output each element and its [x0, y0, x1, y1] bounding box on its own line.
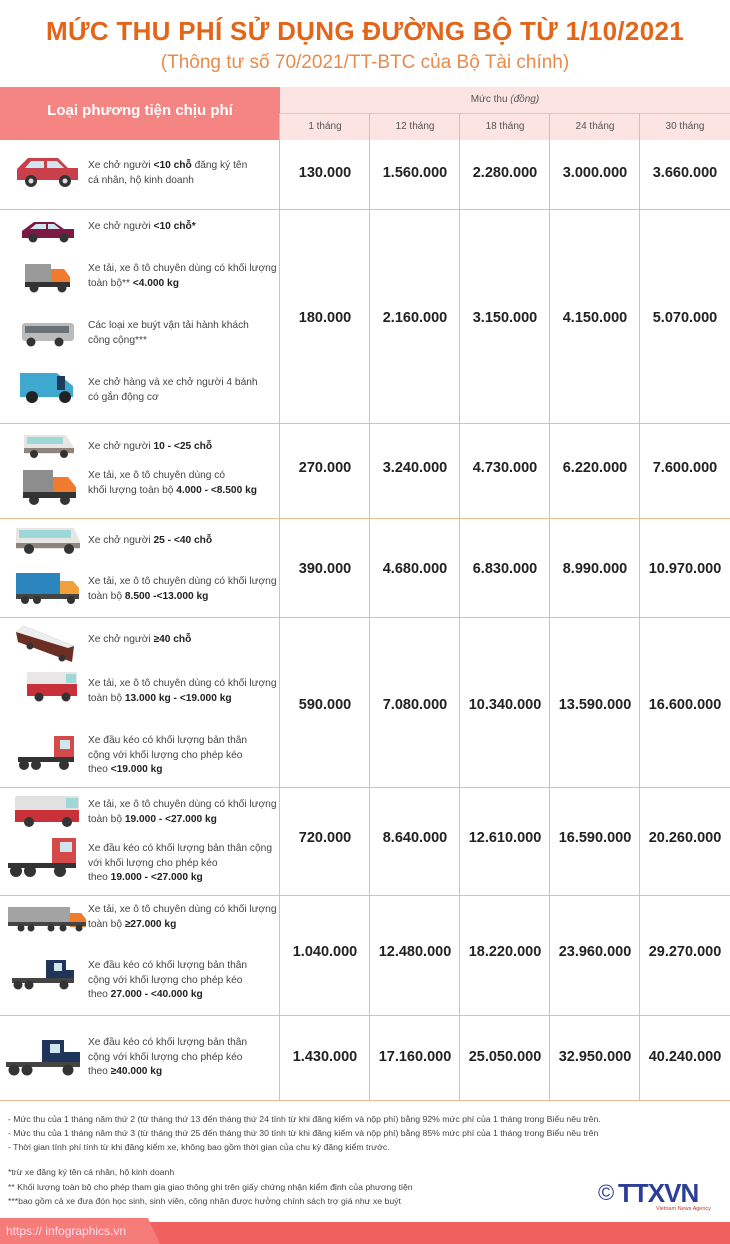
- row 7: 23.960.000: [559, 944, 631, 960]
- text: cá nhân, hộ kinh doanh: [88, 174, 194, 186]
- row 8: 40.240.000: [649, 1049, 721, 1065]
- icon: van: [20, 373, 73, 403]
- notes: - Mức thu của 1 tháng năm thứ 2 (từ tháng thứ 13 đến tháng thứ 24 tính từ khi đăng kiểm và nộp phí) bằng 92% mức phí của 1 tháng trong Biểu nêu trên.: [8, 1114, 601, 1124]
- row 2: có gắn động cơ: [88, 392, 159, 402]
- icon: red tractor: [18, 736, 74, 770]
- notes: [8, 1114, 601, 1152]
- row 2: Xe chở người <10 chỗ*: [88, 221, 196, 232]
- values: 180.000: [299, 310, 351, 326]
- row 1: 1.560.000: [383, 165, 447, 181]
- footnotes: ** Khối lượng toàn bộ cho phép tham gia giao thông ghi trên giấy chứng nhận kiểm định của phương tiện: [8, 1182, 413, 1192]
- row 2: 3.150.000: [473, 310, 537, 326]
- icon: red box truck: [27, 672, 77, 702]
- row 4: 4.680.000: [383, 561, 447, 577]
- row 6: 20.260.000: [649, 830, 721, 846]
- row 5: 13.590.000: [559, 697, 631, 713]
- row 5: Xe tải, xe ô tô chuyên dùng có khối lượng: [88, 678, 277, 689]
- row 1: 2.280.000: [473, 165, 537, 181]
- title: MỨC THU PHÍ SỬ DỤNG ĐƯỜNG BỘ TỪ 1/10/2021: [46, 16, 684, 46]
- row 6: với khối lượng cho phép kéo: [88, 858, 218, 868]
- row 8: 32.950.000: [559, 1049, 631, 1065]
- values: 590.000: [299, 697, 351, 713]
- row 7: toàn bộ ≥27.000 kg: [88, 918, 176, 930]
- row 5: toàn bộ 13.000 kg - <19.000 kg: [88, 692, 232, 704]
- values: 130.000: [299, 165, 351, 181]
- row 8: Xe đầu kéo có khối lượng bản thân: [88, 1037, 247, 1048]
- header: fee: Mức thu (đồng): [471, 94, 539, 105]
- row 5: [16, 626, 721, 775]
- notes: - Thời gian tính phí tính từ khi đăng kiểm xe, không bao gồm thời gian của chu kỳ đăng kiểm trước.: [8, 1142, 390, 1152]
- row 3: Xe chở người 10 - <25 chỗ: [88, 441, 212, 452]
- footer bar: [0, 1222, 730, 1244]
- row 6: theo 19.000 - <27.000 kg: [88, 872, 203, 883]
- header: fee: 18 tháng: [486, 121, 524, 132]
- row 3: 3.240.000: [383, 460, 447, 476]
- row 4: 8.990.000: [563, 561, 627, 577]
- row 6: 8.640.000: [383, 830, 447, 846]
- icon: long truck: [8, 907, 86, 932]
- row 7: Xe tải, xe ô tô chuyên dùng có khối lượng: [88, 904, 277, 915]
- row 6: toàn bộ 19.000 - <27.000 kg: [88, 814, 217, 824]
- row 4: toàn bộ 8.500 -<13.000 kg: [88, 590, 208, 602]
- row 2: [20, 220, 717, 403]
- icon: coach: [16, 528, 80, 554]
- row 3: Xe tải, xe ô tô chuyên dùng có: [88, 470, 225, 481]
- row 6: [8, 796, 721, 883]
- row 3: 7.600.000: [653, 460, 717, 476]
- row 7: 18.220.000: [469, 944, 541, 960]
- icon: red box truck: [15, 796, 79, 827]
- row 6: Xe đầu kéo có khối lượng bản thân cộng: [88, 843, 272, 854]
- row 3: khối lượng toàn bộ 4.000 - <8.500 kg: [88, 484, 257, 496]
- icon: purple car: [22, 222, 74, 242]
- table header: [0, 87, 730, 140]
- notes: - Mức thu của 1 tháng năm thứ 3 (từ tháng thứ 25 đến tháng thứ 30 tính từ khi đăng kiểm và nộp phí) bằng 85% mức phí của 1 tháng trong Biểu nêu trên: [8, 1128, 598, 1138]
- row 2: Xe tải, xe ô tô chuyên dùng có khối lượng: [88, 263, 277, 274]
- row 2: Xe chở hàng và xe chở người 4 bánh: [88, 377, 258, 388]
- row 7: cộng với khối lượng cho phép kéo: [88, 974, 242, 986]
- row 2: 5.070.000: [653, 310, 717, 326]
- row 6: Xe tải, xe ô tô chuyên dùng có khối lượng: [88, 799, 277, 810]
- row 2: toàn bộ** <4.000 kg: [88, 278, 179, 288]
- url tab: [0, 1218, 160, 1244]
- row 5: cộng với khối lượng cho phép kéo: [88, 750, 242, 760]
- icon: red car: [17, 158, 78, 187]
- text: [88, 158, 247, 186]
- grid lines: [279, 113, 280, 1100]
- row 5: 16.600.000: [649, 697, 721, 713]
- row 2: công cộng***: [88, 334, 147, 346]
- header: vehicle type: [0, 87, 280, 140]
- row 7: Xe đầu kéo có khối lượng bản thân: [88, 960, 247, 971]
- footnotes: ***bao gồm cả xe đưa đón học sinh, sinh viên, công nhân được hưởng chính sách trợ giá như xe buýt: [8, 1196, 401, 1206]
- logo: TTXVN: Vietnam News Agency: [656, 1206, 711, 1212]
- row 7: [8, 904, 721, 1000]
- row 8: [6, 1037, 721, 1077]
- logo: TTXVN: ©: [598, 1180, 614, 1205]
- row 8: 17.160.000: [379, 1049, 451, 1065]
- icon: navy tractor: [12, 960, 74, 990]
- icon: minibus: [24, 435, 74, 458]
- header: vehicle type: Loại phương tiện chịu phí: [47, 102, 233, 119]
- row 3: 6.220.000: [563, 460, 627, 476]
- header: fee: [280, 87, 730, 140]
- row 6: 12.610.000: [469, 830, 541, 846]
- header: fee: 1 tháng: [308, 121, 342, 132]
- icon: bus: [22, 323, 74, 346]
- values: 1.430.000: [293, 1049, 357, 1065]
- icon: small truck: [25, 264, 70, 292]
- values: 720.000: [299, 830, 351, 846]
- values: 390.000: [299, 561, 351, 577]
- row 7: theo 27.000 - <40.000 kg: [88, 989, 203, 1000]
- icon: truck orange: [23, 470, 76, 505]
- row 4: [16, 528, 721, 604]
- row 5: theo <19.000 kg: [88, 764, 162, 775]
- row 1: [17, 158, 717, 187]
- values: 270.000: [299, 460, 351, 476]
- row 8: theo ≥40.000 kg: [88, 1066, 162, 1077]
- row 2: 2.160.000: [383, 310, 447, 326]
- logo: TTXVN: [598, 1178, 711, 1212]
- row 5: 10.340.000: [469, 697, 541, 713]
- header: fee: 12 tháng: [396, 121, 434, 132]
- row 4: 10.970.000: [649, 561, 721, 577]
- row 8: cộng với khối lượng cho phép kéo: [88, 1052, 242, 1062]
- row 7: 29.270.000: [649, 944, 721, 960]
- header: fee: 30 tháng: [666, 121, 704, 132]
- row 2: Các loại xe buýt vận tải hành khách: [88, 320, 249, 331]
- footnotes: [8, 1167, 413, 1206]
- row 2: 4.150.000: [563, 310, 627, 326]
- row 6: 16.590.000: [559, 830, 631, 846]
- row 4: Xe tải, xe ô tô chuyên dùng có khối lượng: [88, 576, 277, 587]
- footnotes: *trừ xe đăng ký tên cá nhân, hộ kinh doanh: [8, 1167, 174, 1177]
- row 3: [23, 435, 717, 505]
- row 5: Xe chở người ≥40 chỗ: [88, 634, 191, 645]
- row 1: 3.660.000: [653, 165, 717, 181]
- row 3: 4.730.000: [473, 460, 537, 476]
- icon: big bus: [16, 626, 74, 662]
- row 7: 12.480.000: [379, 944, 451, 960]
- icon: navy tractor large: [6, 1040, 80, 1076]
- icon: blue truck: [16, 573, 79, 604]
- icon: red tractor: [8, 838, 76, 877]
- row 8: 25.050.000: [469, 1049, 541, 1065]
- values: 1.040.000: [293, 944, 357, 960]
- row 5: Xe đầu kéo có khối lượng bản thân: [88, 735, 247, 746]
- text: Xe chở người <10 chỗ đăng ký tên: [88, 160, 247, 171]
- subtitle: (Thông tư số 70/2021/TT-BTC của Bộ Tài chính): [161, 52, 569, 73]
- logo: TTXVN: TTXVN: [618, 1178, 698, 1208]
- row 4: 6.830.000: [473, 561, 537, 577]
- row 1: 3.000.000: [563, 165, 627, 181]
- row 5: 7.080.000: [383, 697, 447, 713]
- header: fee: 24 tháng: [576, 121, 614, 132]
- url tab: https:// infographics.vn: [6, 1224, 126, 1238]
- row 4: Xe chở người 25 - <40 chỗ: [88, 535, 212, 546]
